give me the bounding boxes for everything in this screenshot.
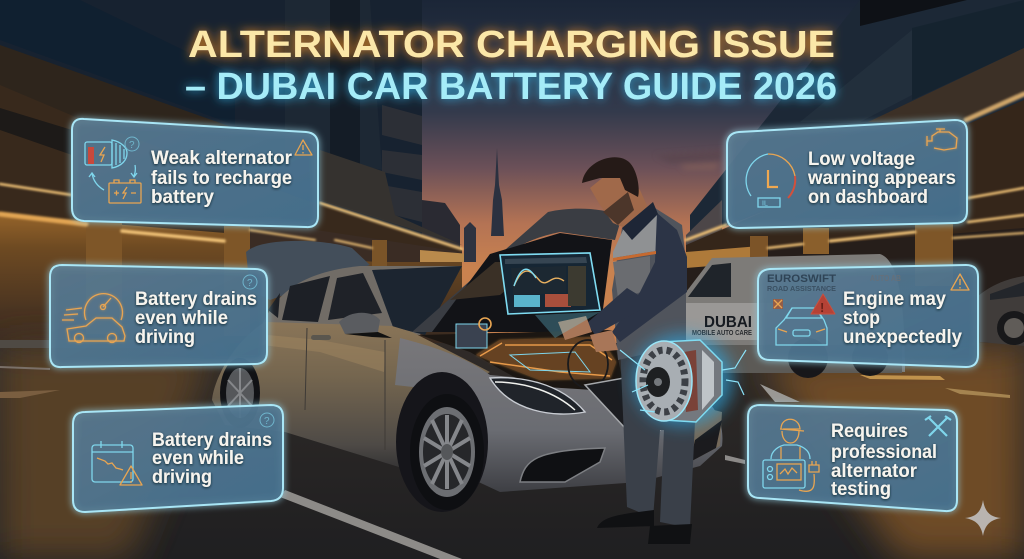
mechanic in gray uniform xyxy=(558,157,696,544)
icon: calendar with falling line xyxy=(92,441,142,485)
trousers xyxy=(620,345,696,528)
greenhouse xyxy=(262,266,462,335)
side windows xyxy=(268,276,330,322)
panel text xyxy=(831,421,937,500)
panel text: fails to recharge xyxy=(151,168,292,189)
bumper corner xyxy=(690,420,722,462)
battery hologram xyxy=(456,318,491,348)
panel: battery drains with calendar xyxy=(73,405,283,512)
van lettering: mobile auto care: MOBILE AUTO CARE xyxy=(692,330,752,337)
rear wheel xyxy=(220,358,260,428)
chest stripe xyxy=(613,251,656,261)
left building xyxy=(0,0,470,345)
panel text: Weak alternator xyxy=(151,148,293,169)
side mirror xyxy=(339,313,380,334)
ground xyxy=(0,340,1024,559)
icon: front of car with warning: ! xyxy=(820,300,824,315)
icon: warning triangle xyxy=(951,274,969,290)
ceiling light strips xyxy=(0,94,1024,249)
icon: voltage gauge xyxy=(746,154,795,208)
icon: front of car with warning xyxy=(773,294,835,345)
panel text: professional xyxy=(831,442,937,463)
panel text xyxy=(807,149,956,208)
icon: help circle: ? xyxy=(264,416,270,427)
title xyxy=(185,24,837,108)
panel text: even while xyxy=(135,308,228,329)
icon: alternator and battery cycle xyxy=(85,137,141,203)
body reflection xyxy=(262,335,385,372)
panel text: driving xyxy=(152,467,212,488)
title line 2: – DUBAI CAR BATTERY GUIDE 2026 xyxy=(185,66,837,108)
panel text: on dashboard xyxy=(808,187,928,208)
icon: crossed tools xyxy=(925,416,951,436)
panel text: Requires xyxy=(831,421,908,442)
panel text: stop xyxy=(843,308,880,329)
icon: voltage gauge: IL xyxy=(762,200,768,208)
holographic diagnostic tablet xyxy=(500,253,600,338)
panel text xyxy=(152,430,272,488)
icon: sparkle watermark xyxy=(965,500,1001,536)
front body xyxy=(395,338,722,492)
pillars xyxy=(86,222,953,336)
lower air intake xyxy=(520,448,605,482)
glowing alternator xyxy=(620,334,746,426)
icon: warning triangle xyxy=(295,140,312,155)
panel text: battery xyxy=(151,187,214,208)
icon: technician with tester xyxy=(763,419,819,491)
windshield xyxy=(372,266,462,335)
torso xyxy=(612,208,686,360)
icon: engine warning xyxy=(927,129,957,150)
panel text: testing xyxy=(831,479,891,500)
arm toward engine xyxy=(587,288,640,335)
silver sedan with open hood xyxy=(212,209,722,512)
panel text xyxy=(135,289,257,348)
collar xyxy=(622,202,658,240)
background parked car xyxy=(978,276,1024,346)
panel: weak alternator xyxy=(72,119,318,227)
engine bay xyxy=(420,330,625,392)
icon: help circle xyxy=(243,275,257,289)
panel van lettering: Euroswift: EUROSWIFT xyxy=(767,273,836,285)
face and neck xyxy=(590,170,648,228)
panel text xyxy=(843,289,962,348)
title line 1: ALTERNATOR CHARGING ISSUE xyxy=(188,24,835,66)
service van xyxy=(680,254,905,378)
raised hood xyxy=(412,209,622,332)
panel van lettering: Euroswift: ROAD ASSISTANCE xyxy=(767,286,836,293)
icon: alternator and battery cycle: ? xyxy=(129,140,135,151)
boots xyxy=(597,510,692,544)
side body xyxy=(212,322,490,475)
front wheel xyxy=(396,372,488,512)
panel text: even while xyxy=(152,448,244,469)
panel text xyxy=(151,148,293,208)
door cuts xyxy=(305,328,385,450)
panel: low voltage warning xyxy=(727,120,967,228)
hood underside reflection xyxy=(450,262,540,300)
Burj Khalifa silhouette xyxy=(491,148,504,236)
van lettering: Dubai: DUBAI xyxy=(704,314,752,331)
panel van lettering: Euroswift xyxy=(767,273,901,293)
grille xyxy=(585,378,660,430)
panel: professional testing xyxy=(748,405,957,511)
panel: battery drains while driving xyxy=(50,265,267,367)
icon: help circle: ? xyxy=(247,278,253,289)
panel text: Engine may xyxy=(843,289,946,310)
engine glow xyxy=(476,337,616,380)
panel text: Battery drains xyxy=(135,289,257,310)
panel text: Low voltage xyxy=(808,149,915,170)
panel text: Battery drains xyxy=(152,430,272,451)
hood prop cable ring xyxy=(568,340,608,388)
sleeve xyxy=(612,213,687,342)
icon: speedometer and car xyxy=(62,294,125,342)
beard shade xyxy=(603,192,634,225)
trunk lid behind roof xyxy=(246,241,370,300)
panel text: warning appears xyxy=(807,168,956,189)
icon: help circle xyxy=(260,413,274,427)
hair xyxy=(582,157,639,197)
panel text: unexpectedly xyxy=(843,327,962,348)
hands xyxy=(558,316,618,352)
headlight xyxy=(490,378,585,414)
panel van lettering: Euroswift: AUTO AB xyxy=(870,274,901,283)
panel text: alternator xyxy=(831,461,918,482)
panel: engine may stop xyxy=(758,265,978,367)
panel text: driving xyxy=(135,327,195,348)
electric arcs xyxy=(620,350,746,412)
right building xyxy=(686,0,1024,345)
door handle xyxy=(311,335,331,340)
clouds at the horizon xyxy=(655,150,725,170)
